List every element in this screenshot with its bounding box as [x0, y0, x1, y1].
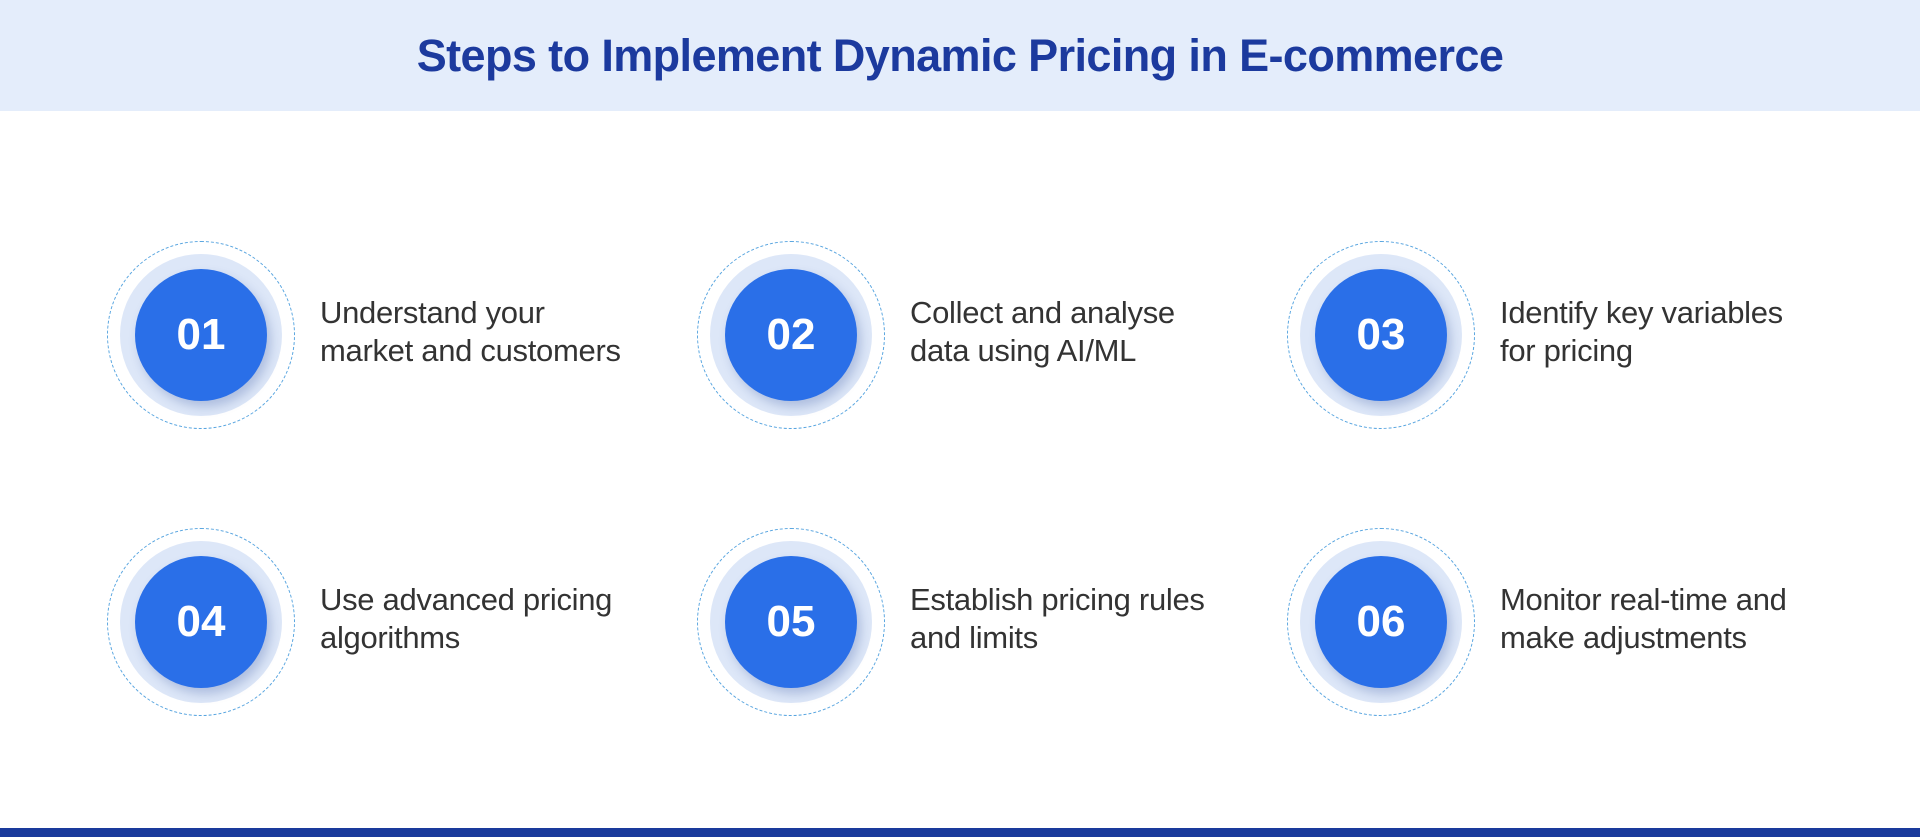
step 03: Identify key variables — [1500, 295, 1783, 330]
step 01: market and customers — [320, 333, 621, 368]
step 06 — [1287, 528, 1787, 716]
step 04: algorithms — [320, 620, 460, 655]
step 04: 04 — [177, 597, 225, 646]
step 04: Use advanced pricing — [320, 582, 612, 617]
step 01 — [107, 241, 621, 429]
title: Steps to Implement Dynamic Pricing in E-commerce — [417, 30, 1503, 81]
step 03: 03 — [1357, 310, 1405, 359]
step 01: 01 — [177, 310, 225, 359]
step 06: Monitor real-time and — [1500, 582, 1787, 617]
step 05: Establish pricing rules — [910, 582, 1205, 617]
step 05: 05 — [767, 597, 815, 646]
step 02 — [697, 241, 1175, 429]
step 01: Understand your — [320, 295, 545, 330]
step 05 — [697, 528, 1205, 716]
step 06: 06 — [1357, 597, 1405, 646]
step 06: make adjustments — [1500, 620, 1747, 655]
step 02: 02 — [767, 310, 815, 359]
step 03 — [1287, 241, 1783, 429]
step 02: data using AI/ML — [910, 333, 1136, 368]
footer bar — [0, 828, 1920, 837]
header band — [0, 0, 1920, 111]
step 02: Collect and analyse — [910, 295, 1175, 330]
step 05: and limits — [910, 620, 1038, 655]
step 03: for pricing — [1500, 333, 1633, 368]
step 04 — [107, 528, 612, 716]
